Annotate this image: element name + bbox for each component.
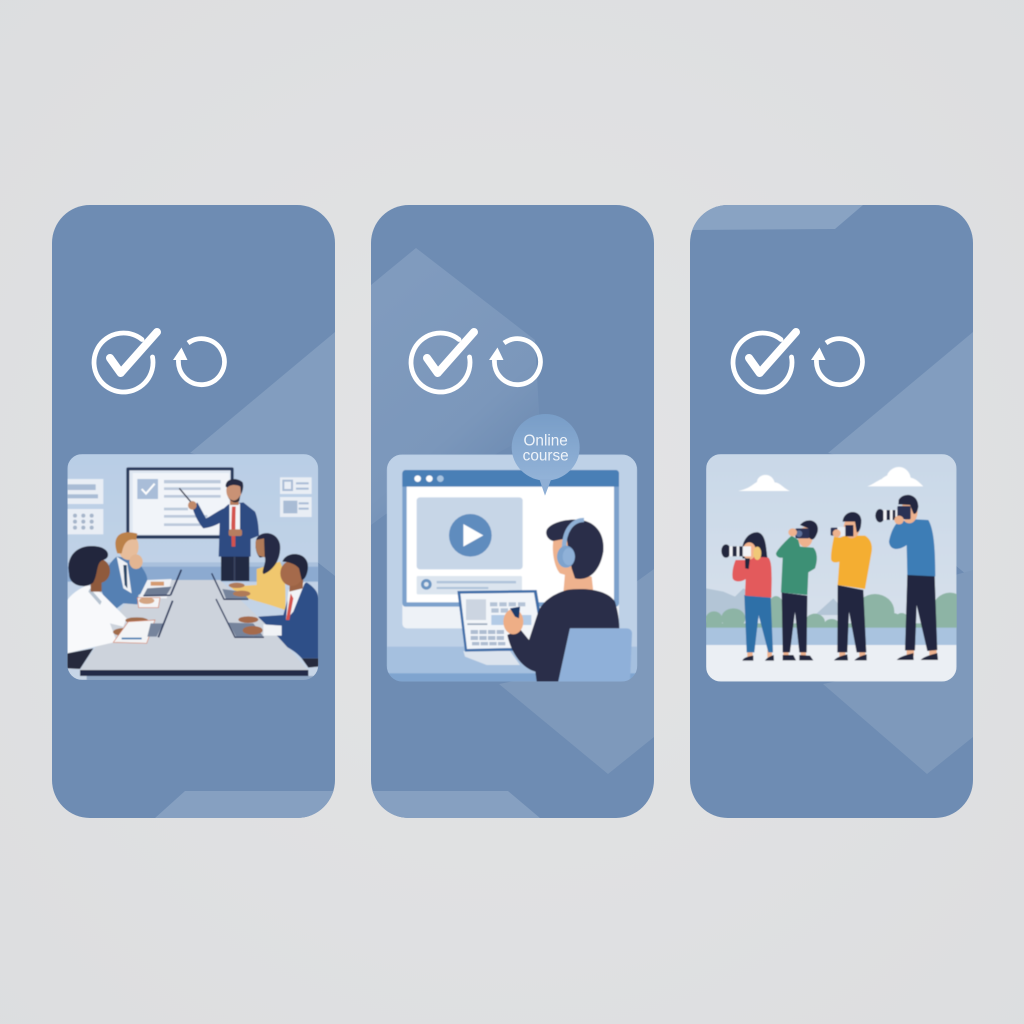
icon: refresh arrow — [811, 339, 862, 385]
panel: online course — [371, 205, 654, 818]
icon: check mark — [411, 332, 474, 392]
presentation screen — [126, 467, 234, 539]
conference table — [80, 580, 318, 681]
laptops right — [212, 573, 282, 637]
seated woman right — [230, 533, 286, 610]
photographer: red sweater — [721, 532, 774, 661]
icon: check mark — [733, 332, 796, 392]
icon: refresh arrow — [173, 339, 224, 385]
laptops and papers left — [113, 570, 181, 643]
posters left — [67, 479, 103, 534]
clouds — [738, 467, 923, 491]
speech bubble — [512, 414, 580, 496]
video player — [417, 497, 523, 594]
posters right — [280, 477, 312, 517]
learner with headphones — [503, 520, 619, 682]
photographer: blue sweater — [875, 495, 938, 660]
bubble text: Online — [524, 432, 568, 449]
illustration: online course — [387, 414, 637, 682]
panel: meeting — [52, 205, 335, 818]
seated woman left — [67, 546, 148, 669]
photographer: green sweater — [776, 520, 818, 660]
hills and river — [705, 588, 968, 682]
illustration: photographers — [705, 454, 968, 682]
panel: photography — [690, 205, 973, 818]
chair — [558, 628, 632, 682]
presenter — [179, 479, 259, 581]
seated man right — [258, 554, 318, 668]
illustration: team meeting — [67, 454, 318, 681]
browser window — [402, 470, 619, 628]
photographer: yellow sweater — [831, 512, 872, 660]
icon: check mark — [94, 332, 157, 392]
icon: refresh arrow — [489, 339, 540, 385]
seated man left — [99, 532, 147, 613]
bubble text: course — [523, 448, 569, 465]
laptop — [457, 590, 547, 665]
